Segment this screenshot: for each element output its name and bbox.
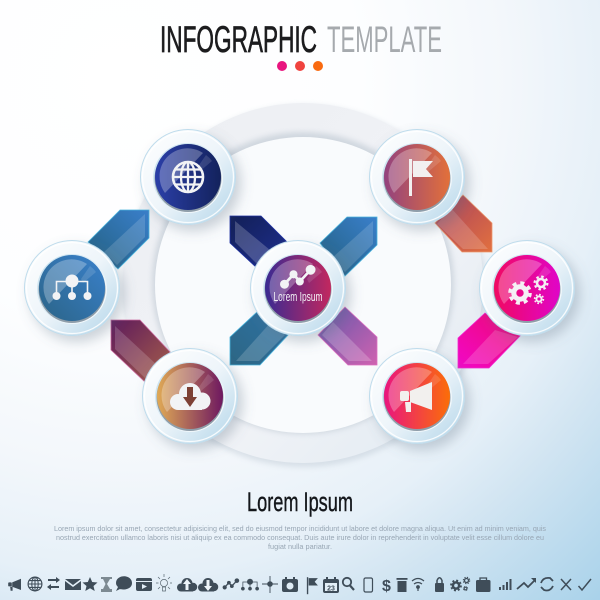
arrow: gears to megaphone: [458, 313, 520, 368]
node: center with label: Lorem Ipsum: [273, 289, 323, 304]
arrow: network to cloud: [111, 320, 170, 382]
icon: wifi: [412, 578, 424, 591]
icon: calendar coin: [282, 577, 298, 592]
icon: dollar: $: [382, 578, 391, 595]
title: TEMPLATE: [327, 19, 442, 60]
icon: crosshair: [262, 576, 278, 593]
icon: cloud upload: [177, 578, 197, 592]
icon: megaphone: [8, 579, 21, 591]
body text: fugiat nulla pariatur.: [268, 542, 332, 551]
icon: trash: [396, 578, 408, 592]
icon: signal bars: [499, 579, 512, 590]
node: gears: [480, 240, 574, 336]
body text: Lorem ipsum dolor sit amet, consectetur adipisicing elit, sed do eiusmod tempor incididunt ut labore et dolore magna aliqua. Ut enim ad minim veniam, quis: [54, 524, 546, 533]
icon: star: [82, 577, 98, 591]
node: flag: [370, 130, 464, 224]
heading: Lorem Ipsum: [247, 487, 353, 517]
icon: sync: [541, 578, 553, 590]
icon: chat: [116, 576, 132, 591]
icon: hourglass: [101, 577, 112, 592]
arrow: flag to gears: [435, 195, 492, 252]
icon: flag: [307, 577, 318, 594]
node: cloud download: [142, 348, 238, 444]
arrow: center bottom-right: [318, 307, 377, 365]
node: megaphone: [370, 348, 464, 444]
icon: calendar date: 23: [327, 586, 335, 592]
icon: transfer arrows: [47, 577, 60, 590]
icon: trend arrow: [517, 578, 536, 589]
arrow: center top-left: [230, 216, 287, 268]
node: network: [24, 240, 120, 336]
icon: search: [343, 578, 354, 590]
icon: close: [561, 579, 571, 590]
title: INFOGRAPHIC: [160, 19, 317, 60]
icon: globe: [28, 577, 42, 591]
title accent dots: [277, 61, 323, 71]
central ring: [123, 103, 485, 467]
icon: toolbox: [476, 578, 490, 592]
icon: cloud download: [198, 578, 218, 592]
arrow: center bottom-left: [230, 312, 288, 365]
body text: nostrud exercitation ullamco laboris nisi ut aliquip ex ea commodo consequat. Duis aute irure dolor in reprehenderit in voluptate velit esse cillum dolore eu: [56, 533, 544, 542]
arrow: network to globe: [88, 210, 149, 269]
body text: [54, 524, 546, 551]
icon bar: [8, 574, 591, 595]
node: globe: [140, 130, 236, 224]
icon: phone: [364, 578, 372, 592]
icon: check: [578, 579, 591, 590]
icon: mail: [65, 579, 81, 590]
icon: calendar date: [323, 577, 339, 593]
icon: line nodes: [223, 578, 239, 589]
icon: lock: [435, 578, 444, 592]
arrow: center top-right: [320, 217, 377, 276]
icon: light bulb: [156, 574, 172, 591]
icon: gears: [451, 577, 470, 591]
icon: video card: [136, 578, 152, 591]
icon: network: [241, 579, 259, 591]
node: center with label: [250, 240, 346, 336]
